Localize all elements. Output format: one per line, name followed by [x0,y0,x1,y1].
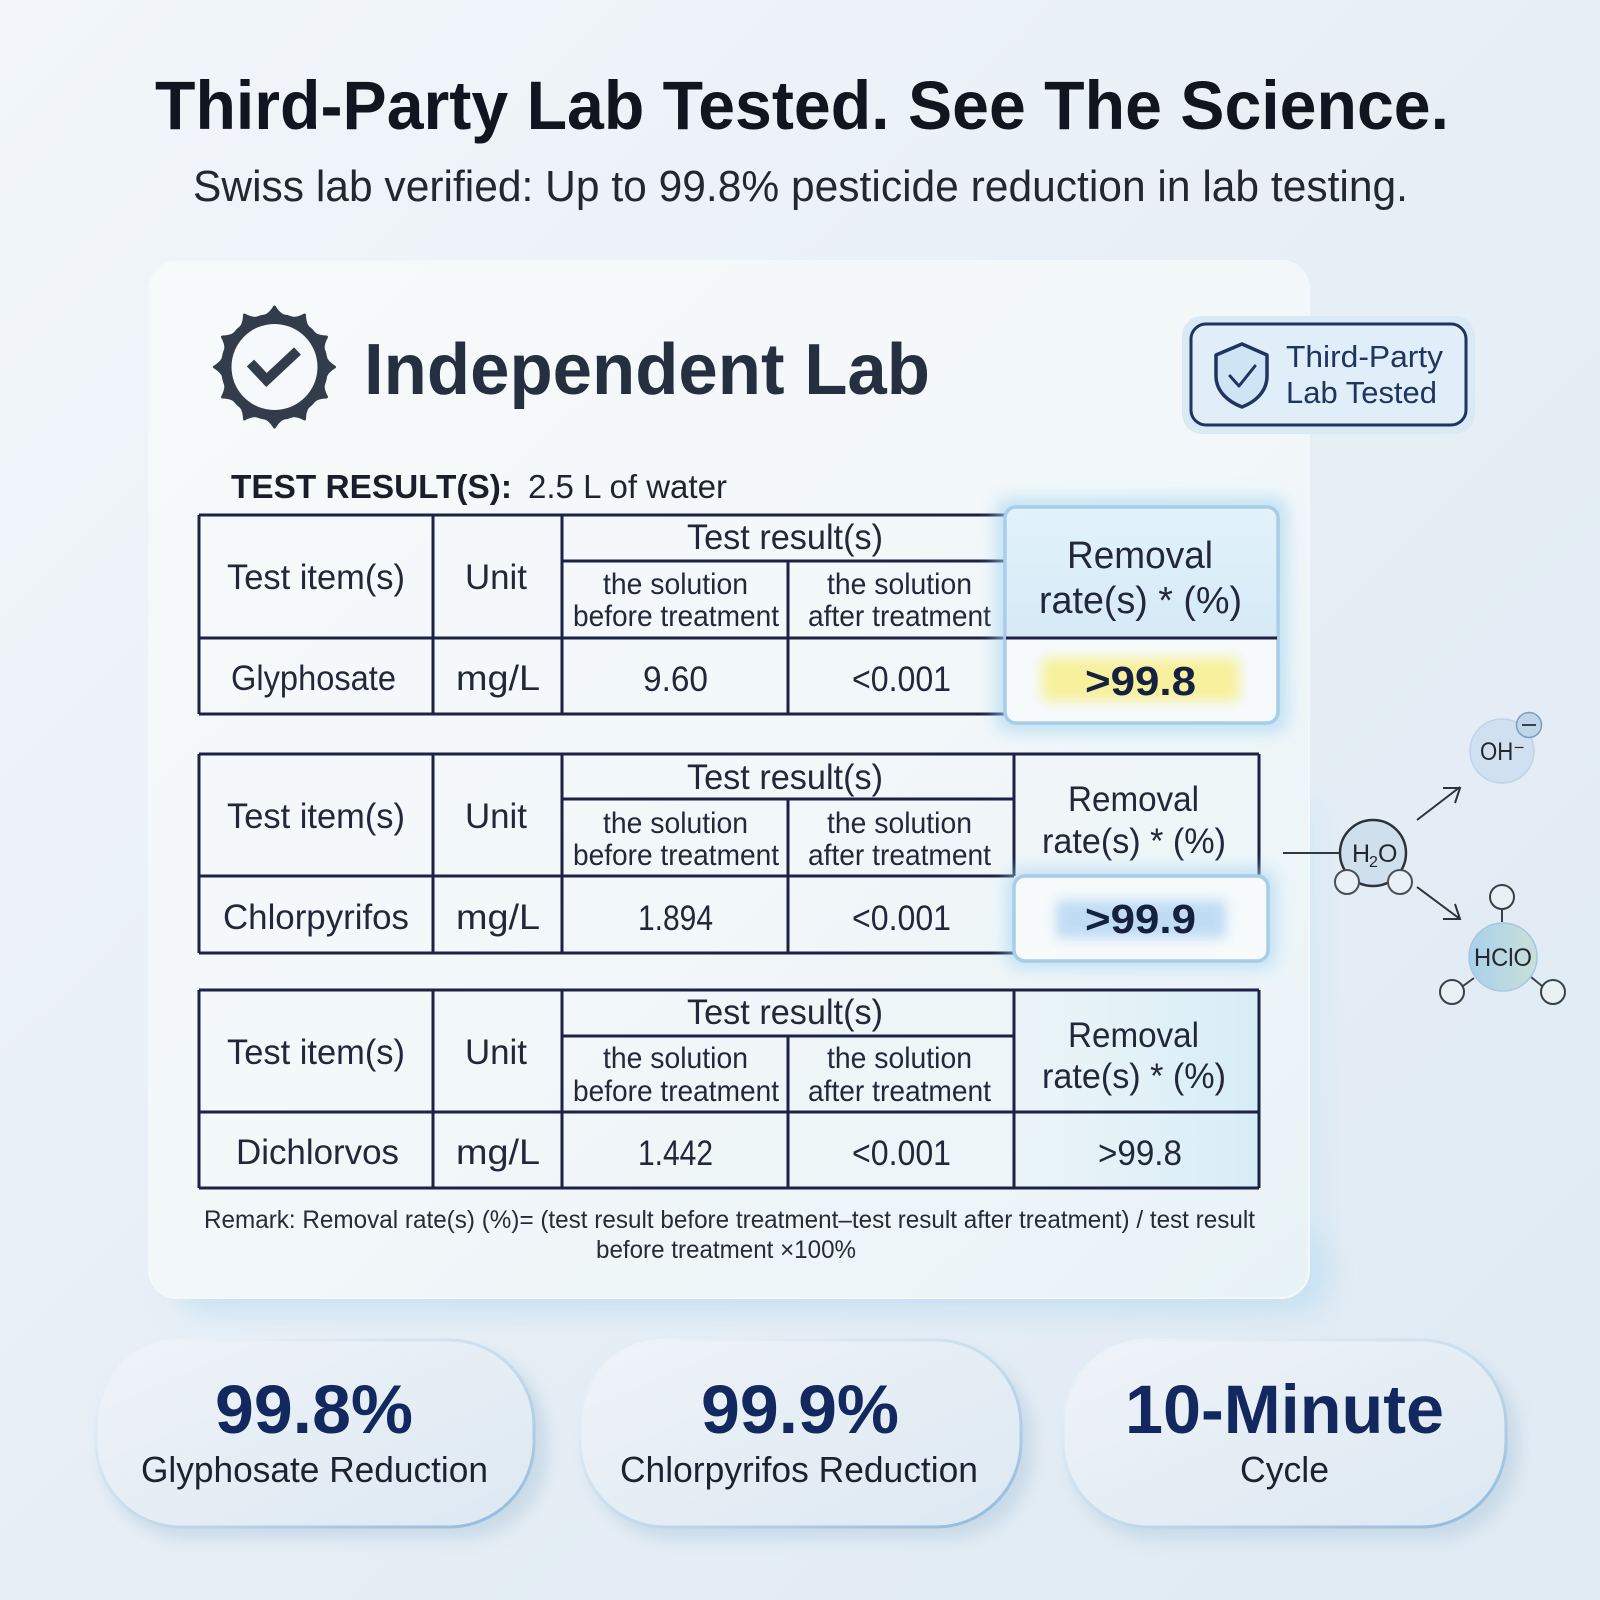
text: test conditions: TEST RESULT(S): [231,468,512,505]
panel: lab report card [149,261,1325,1310]
stat pill: 99.8% glyphosate: 99.8% [215,1371,413,1448]
table: chlorpyrifos [199,754,1259,953]
table: chlorpyrifos: <0.001 [852,899,951,938]
text: remark [204,1206,1255,1264]
text: test conditions: 2.5 L of water [528,468,727,505]
table: dichlorvos: Test item(s) [227,1033,405,1072]
text: remark: before treatment ×100% [596,1236,856,1264]
table: dichlorvos: >99.8 [1098,1134,1182,1173]
table: dichlorvos: the solution [603,1042,748,1075]
table: glyphosate: the solution [827,568,972,601]
table: chlorpyrifos: Test result(s) [687,758,883,797]
table: glyphosate: the solution [603,568,748,601]
table: dichlorvos: after treatment [808,1075,992,1108]
table: dichlorvos: mg/L [456,1133,540,1172]
table: dichlorvos: the solution [827,1042,972,1075]
table: chlorpyrifos: the solution [603,807,748,840]
stat pill: 99.9% chlorpyrifos: 99.9% [701,1371,899,1448]
callout: glyphosate removal rate: >99.8 [1085,658,1196,704]
arrow: to HClO [1417,887,1460,919]
table: glyphosate [199,515,1005,714]
table: chlorpyrifos: before treatment [573,839,780,872]
stat pill: 10-minute cycle: 10-Minute [1125,1371,1444,1448]
table: dichlorvos: Unit [465,1033,527,1072]
table: glyphosate: mg/L [456,659,540,698]
table: dichlorvos: before treatment [573,1075,780,1108]
molecule: HClO [1440,885,1565,1004]
table: chlorpyrifos: after treatment [808,839,992,872]
arrow: to OH- [1417,787,1460,820]
molecule: H2O: H [1352,840,1370,868]
molecule: OH- [1470,712,1542,783]
badge: third-party lab tested: Third-Party [1286,339,1444,374]
callout: glyphosate removal rate: rate(s) * (%) [1039,580,1242,622]
table: chlorpyrifos: mg/L [456,898,540,937]
text: test conditions [231,468,727,505]
callout: glyphosate removal rate [995,497,1288,733]
table: dichlorvos: Test result(s) [687,993,883,1032]
heading: Independent Lab: Independent Lab [364,330,930,410]
table: glyphosate: Test item(s) [227,558,405,597]
stat pill: 99.9% chlorpyrifos: Chlorpyrifos Reduction [620,1449,978,1490]
table: dichlorvos: Removal [1068,1016,1199,1055]
table: chlorpyrifos: Test item(s) [227,797,405,836]
table: dichlorvos: Dichlorvos [236,1133,399,1172]
molecule: H2O: O [1378,840,1397,868]
stat pill: 99.9% chlorpyrifos [580,1340,1033,1539]
table: dichlorvos: <0.001 [852,1134,951,1173]
table: dichlorvos: 1.442 [638,1134,713,1173]
badge: third-party lab tested [1182,316,1475,434]
molecule: OH-: OH⁻ [1480,738,1525,766]
table: dichlorvos: rate(s) * (%) [1042,1057,1226,1096]
table: chlorpyrifos: Unit [465,797,527,836]
title: Third-Party Lab Tested. See The Science. [155,67,1449,144]
molecule: HClO: HClO [1474,944,1532,972]
table: glyphosate: 9.60 [643,660,708,699]
icon: verified seal [214,307,334,427]
stat pill: 99.8% glyphosate [96,1340,548,1539]
stat pill: 10-minute cycle [1063,1340,1518,1539]
table: chlorpyrifos: Chlorpyrifos [223,898,409,937]
table: glyphosate: after treatment [808,600,992,633]
subtitle: Swiss lab verified: Up to 99.8% pesticide reduction in lab testing. [193,162,1408,211]
table: glyphosate: before treatment [573,600,780,633]
diagram: water electrolysis molecules [1283,712,1565,1004]
badge: third-party lab tested: Lab Tested [1286,375,1437,410]
table: chlorpyrifos: the solution [827,807,972,840]
table: glyphosate: Unit [465,558,527,597]
icon: shield check [1216,344,1267,407]
table: glyphosate: <0.001 [852,660,951,699]
callout: glyphosate removal rate: Removal [1067,535,1213,577]
stat pill: 99.8% glyphosate: Glyphosate Reduction [141,1449,488,1490]
table: glyphosate: Glyphosate [231,659,396,698]
table: glyphosate: Test result(s) [687,518,883,557]
callout: chlorpyrifos removal rate [1006,868,1276,969]
text: remark: Remark: Removal rate(s) (%)= (test result before treatment–test result after treatment) / test result [204,1206,1255,1234]
table: chlorpyrifos: rate(s) * (%) [1042,822,1226,861]
table: chlorpyrifos: Removal [1068,780,1199,819]
molecule: H2O [1335,820,1412,894]
table: dichlorvos [199,990,1259,1188]
table: chlorpyrifos: 1.894 [638,899,713,938]
stat pill: 10-minute cycle: Cycle [1240,1449,1329,1490]
molecule: H2O: 2 [1369,854,1378,871]
callout: chlorpyrifos removal rate: >99.9 [1085,896,1196,942]
